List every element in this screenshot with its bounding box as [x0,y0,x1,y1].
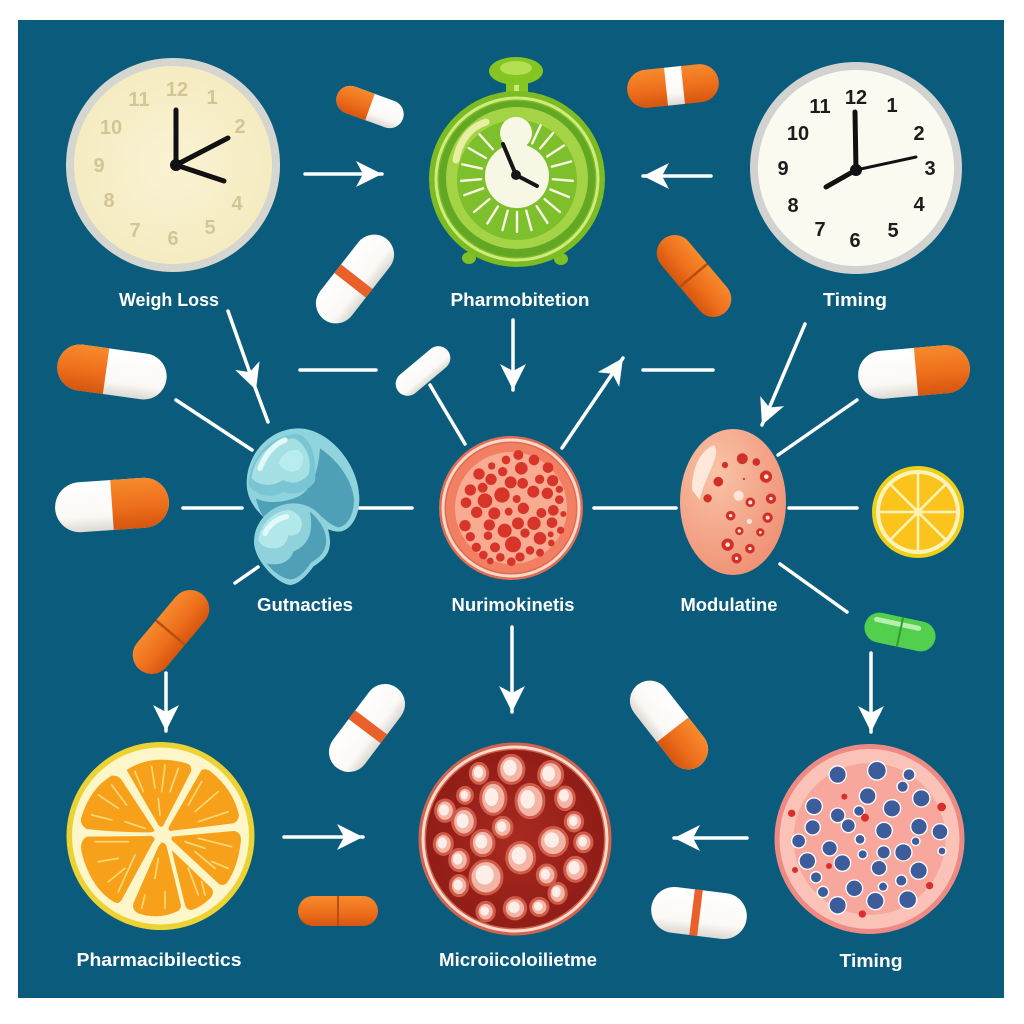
capsule: orange lower left [125,582,217,682]
icon: white wall clock: 11 [809,96,831,118]
capsule: small white center [391,341,455,401]
label: Modulatine: Modulatine [680,594,778,615]
label: Timing top: Timing [823,289,887,310]
icon: orange slice [66,742,254,930]
capsule: white orange lower [622,672,716,778]
capsule: white red band [308,226,402,332]
icon: white wall clock [750,62,962,274]
label: Microiicoloilietme: Microiicoloilietme [439,949,597,970]
icon: green stopwatch [429,57,605,267]
icon: white wall clock: 2 [913,123,925,145]
icon: cream wall clock [66,58,280,272]
icon: cream wall clock: 1 [206,87,218,109]
icon: white wall clock: 10 [787,123,809,145]
icon: white wall clock: 8 [787,195,799,217]
icon: cream wall clock: 4 [231,193,243,215]
label: Weigh Loss: Weigh Loss [119,289,219,310]
icon: pink egg cell [680,429,786,575]
icon: white wall clock: 6 [849,230,861,252]
label: Timing bottom: Timing [840,950,902,971]
icon: white wall clock: 5 [887,220,899,242]
arrows and connectors [166,174,871,838]
label: Pharmacibilectics: Pharmacibilectics [76,949,242,970]
icon: cream wall clock: 10 [100,117,122,139]
capsule: orange white top [332,82,408,132]
icon: white wall clock: 3 [924,158,936,180]
icon: blue blobs [247,428,359,585]
capsule: white orange right [856,343,972,401]
icon: cream wall clock: 8 [103,190,115,212]
icon: cream wall clock: 6 [167,228,179,250]
label: Pharmobitetion: Pharmobitetion [450,289,590,310]
capsule: small orange bottom [298,896,378,926]
icon: cream wall clock: 12 [166,79,188,101]
icon: red dotted cell [439,436,583,580]
icon: white wall clock: 12 [845,87,867,109]
capsule: white orange left [53,476,171,534]
icon: white wall clock: 9 [777,158,789,180]
capsule: green [862,610,938,654]
icon: cream wall clock: 11 [128,89,150,111]
capsule: orange white left [54,342,170,402]
icon: white wall clock: 1 [886,95,898,117]
label: Nurimokinetis: Nurimokinetis [452,594,574,615]
icon: small lemon slice [872,466,964,558]
icon: cream wall clock: 9 [93,155,105,177]
icon: dark red cell [418,742,612,936]
capsule: white red band lower [321,676,413,780]
icon: pink cell blue dots [774,744,964,934]
icon: white wall clock: 4 [913,194,925,216]
icon: white wall clock: 7 [814,219,826,241]
icon: cream wall clock: 7 [129,220,141,242]
icon: cream wall clock: 5 [204,217,216,239]
capsule: orange band top right [625,62,721,110]
capsule: white orange band bottom [649,884,749,942]
capsule: orange diagonal [649,228,739,324]
icon: cream wall clock: 2 [234,116,246,138]
label: Gutnacties: Gutnacties [257,594,353,615]
